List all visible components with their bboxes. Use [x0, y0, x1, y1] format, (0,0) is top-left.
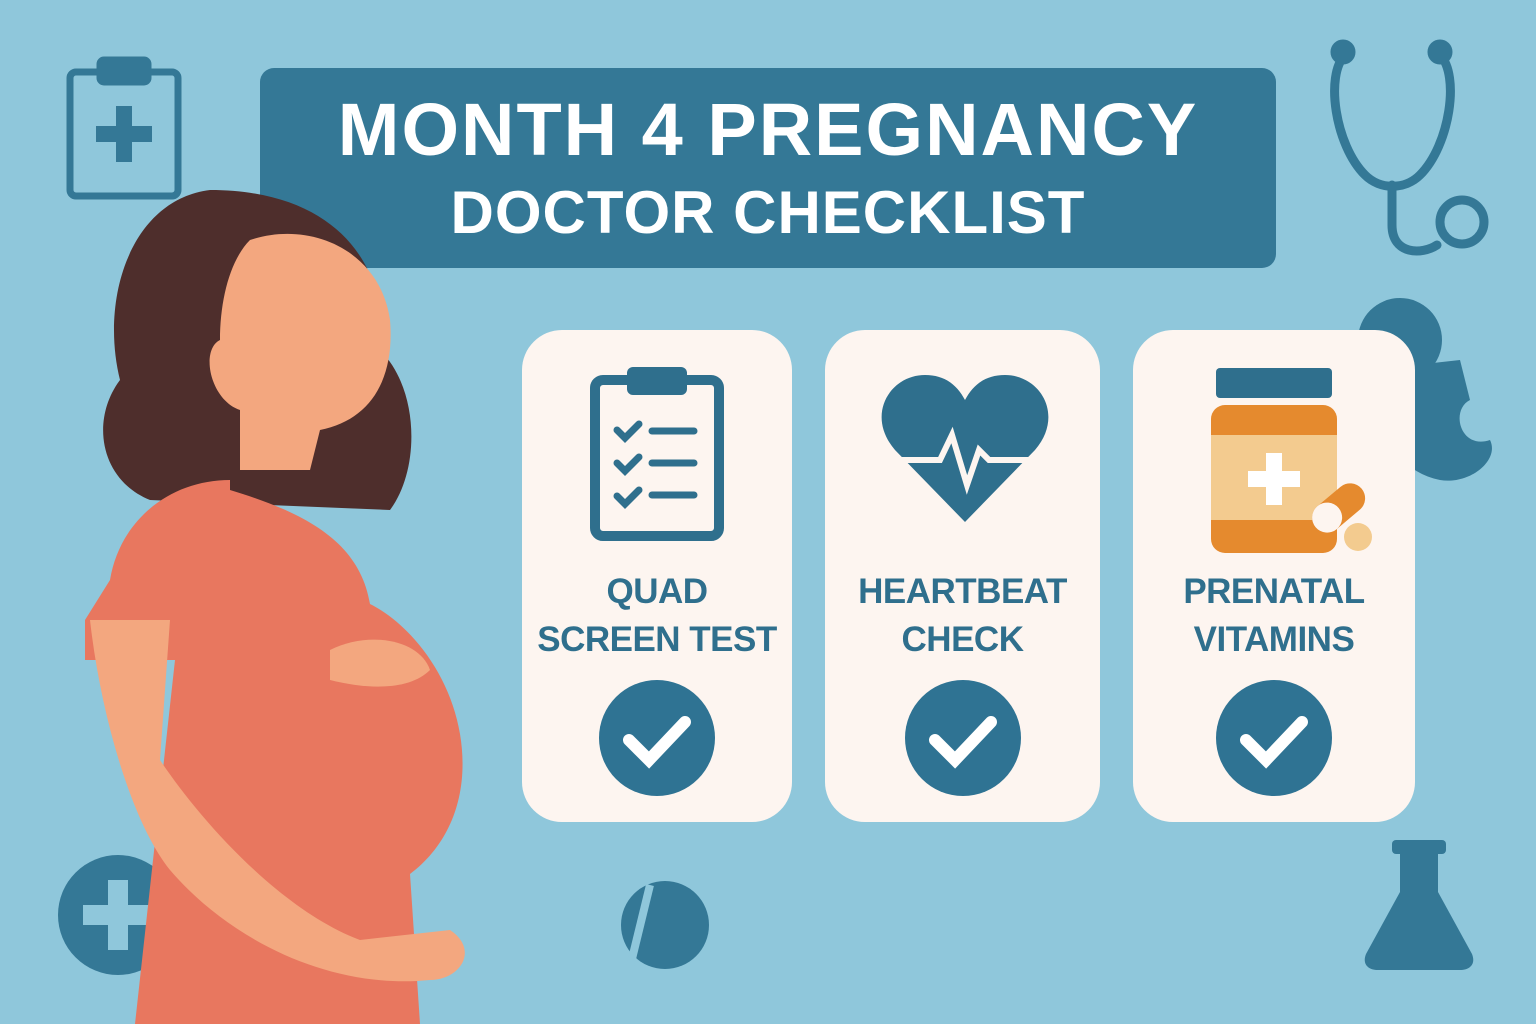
icon: stethoscope [1335, 44, 1484, 251]
title banner [260, 68, 1276, 268]
label: QUAD [606, 572, 708, 611]
icon: fetus [1358, 298, 1492, 481]
label: CHECK [902, 620, 1023, 659]
icon: heart [882, 375, 1048, 522]
icon: plus circle bottom-left [58, 855, 178, 975]
icon: flask [1365, 840, 1473, 970]
check circle [599, 680, 715, 796]
card: heartbeat check [825, 330, 1100, 822]
label: VITAMINS [1194, 620, 1354, 659]
icon: vitamin bottle [1211, 368, 1372, 553]
illustration: pregnant woman [85, 190, 465, 1024]
card: quad screen test [522, 330, 792, 822]
icon: clipboard top-left [70, 60, 178, 196]
label: PRENATAL [1183, 572, 1365, 611]
title banner: MONTH 4 PREGNANCY [338, 88, 1198, 171]
label: HEARTBEAT [858, 572, 1067, 611]
label [537, 572, 777, 659]
check circle [905, 680, 1021, 796]
card: prenatal vitamins [1133, 330, 1415, 822]
check circle [1216, 680, 1332, 796]
title banner: DOCTOR CHECKLIST [451, 179, 1085, 246]
label [1183, 572, 1365, 659]
label [858, 572, 1067, 659]
icon: checklist clipboard [590, 367, 724, 541]
label: SCREEN TEST [537, 620, 777, 659]
icon: pill [621, 881, 709, 969]
